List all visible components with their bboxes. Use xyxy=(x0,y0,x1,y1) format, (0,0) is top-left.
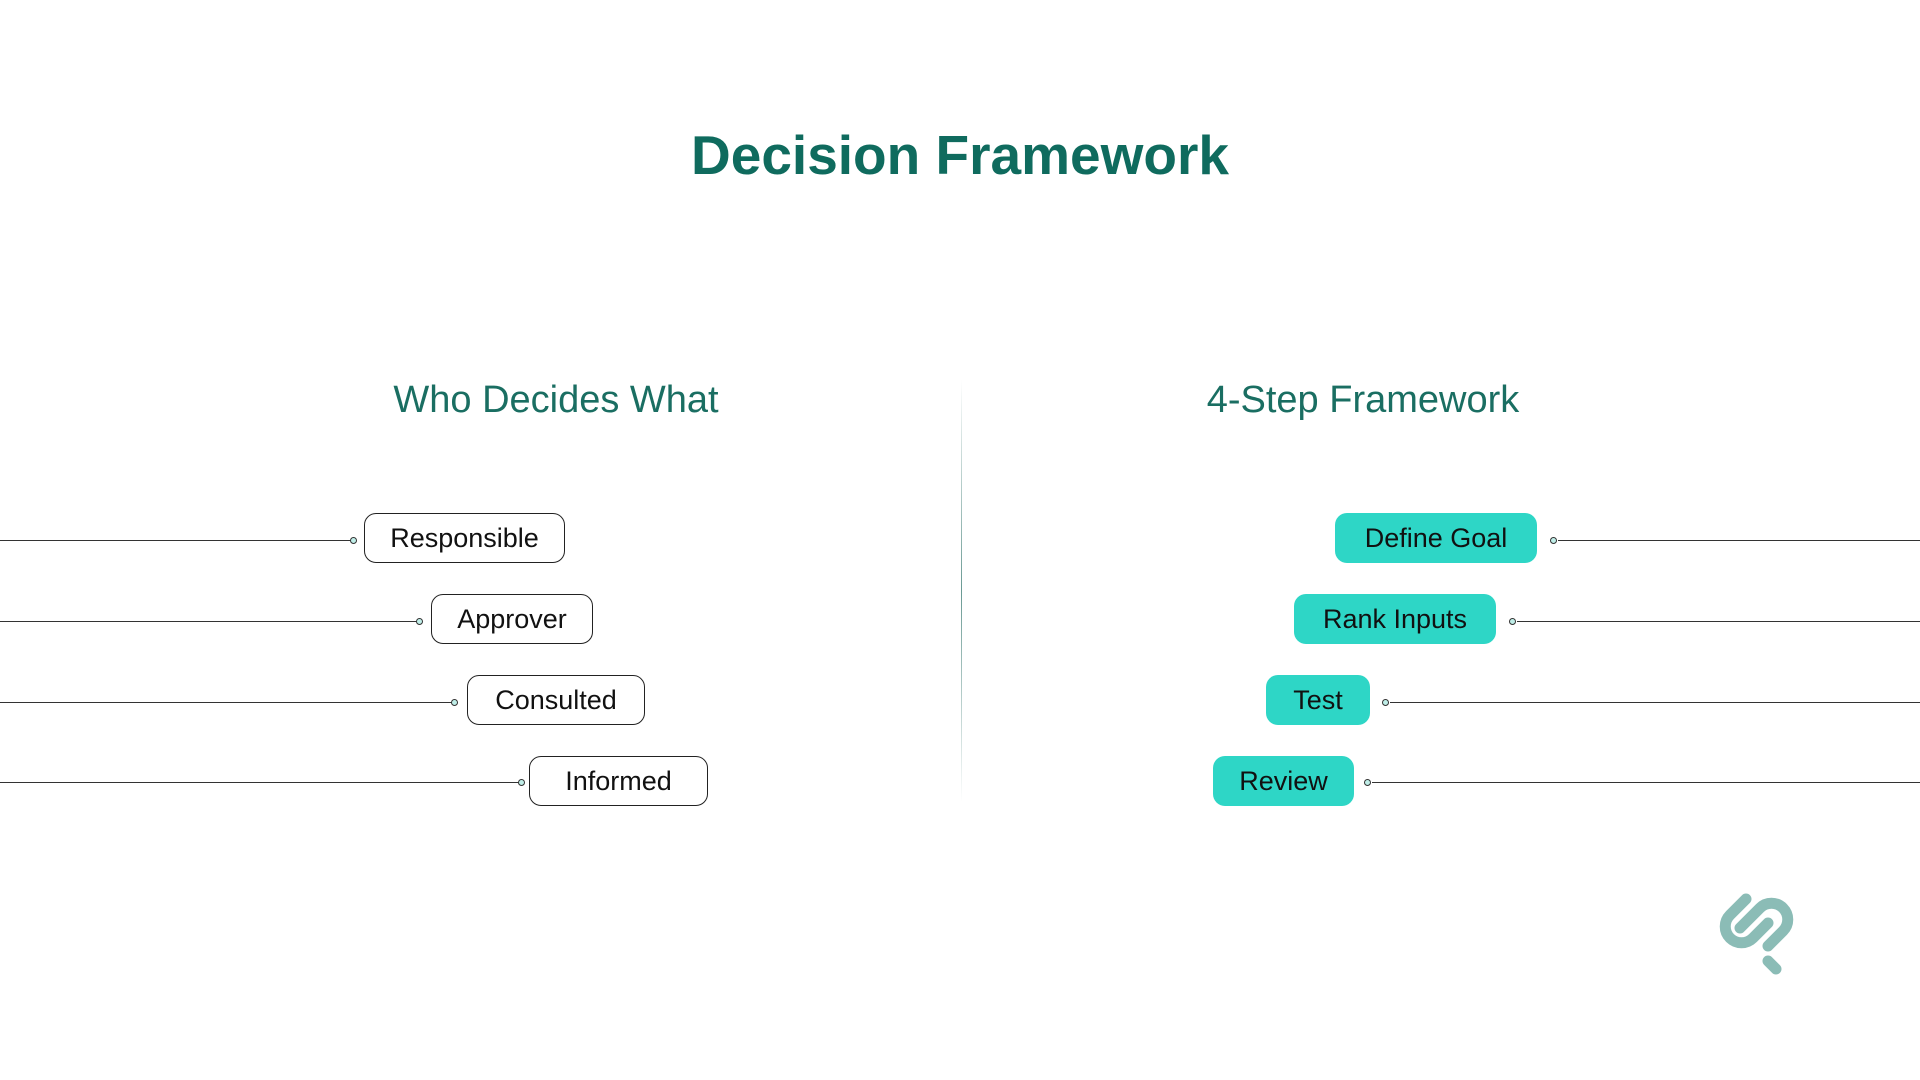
role: approver xyxy=(0,594,593,644)
step: test xyxy=(1266,675,1920,725)
panel: steps: Define Goal xyxy=(1365,522,1507,552)
heading: who decides what: Who Decides What xyxy=(393,379,719,421)
panel: roles: Informed xyxy=(565,766,672,796)
step: rank inputs xyxy=(1294,594,1920,644)
divider xyxy=(961,380,962,802)
panel: roles: Responsible xyxy=(390,522,539,552)
heading: 4-step framework: 4-Step Framework xyxy=(1207,379,1519,421)
role: consulted xyxy=(0,675,645,725)
panel: steps xyxy=(1213,513,1920,806)
panel: steps: Test xyxy=(1293,684,1343,714)
panel: roles: Consulted xyxy=(495,684,617,714)
panel: steps: Rank Inputs xyxy=(1323,604,1467,634)
panel: roles: Approver xyxy=(457,604,567,634)
title: Decision Framework xyxy=(691,124,1229,186)
step: define goal xyxy=(1335,513,1920,563)
panel: steps: Review xyxy=(1239,766,1328,796)
panel: roles xyxy=(0,513,708,806)
role: informed xyxy=(0,756,708,806)
icon: logo xyxy=(1720,894,1794,974)
role: responsible xyxy=(0,513,565,563)
step: review xyxy=(1213,756,1920,806)
